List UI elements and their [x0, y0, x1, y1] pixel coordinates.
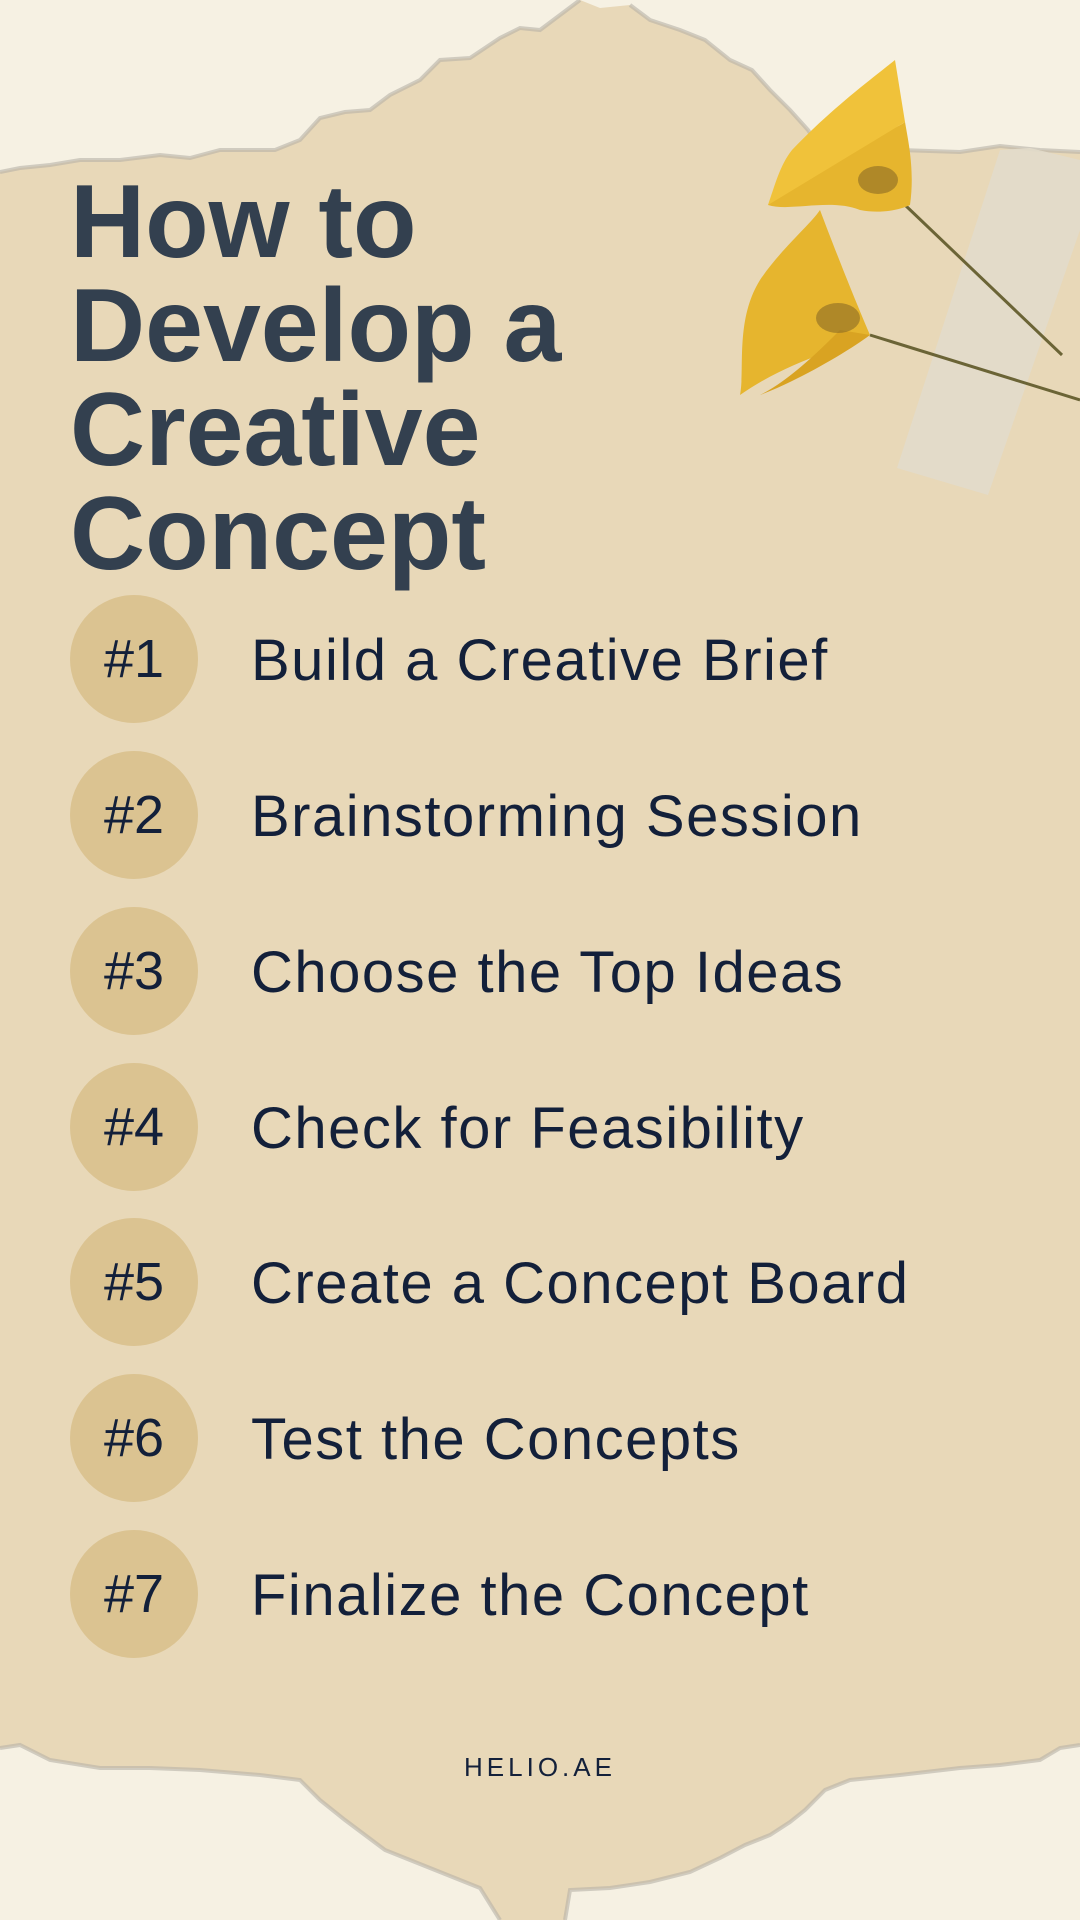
- title: How to: [70, 164, 417, 280]
- step 6: Test the Concepts: [251, 1407, 741, 1472]
- step 7: [70, 1530, 810, 1658]
- step 5: #5: [104, 1252, 164, 1312]
- step 2: [70, 751, 863, 879]
- step 1: #1: [104, 629, 164, 689]
- step 1: [70, 595, 829, 723]
- step 2: Brainstorming Session: [251, 784, 863, 849]
- step 7: Finalize the Concept: [251, 1563, 810, 1628]
- step list: [70, 595, 909, 1658]
- step 3: #3: [104, 941, 164, 1001]
- step 3: [70, 907, 844, 1035]
- step 4: [70, 1063, 805, 1191]
- step 5: Create a Concept Board: [251, 1251, 909, 1316]
- step 4: #4: [104, 1097, 164, 1157]
- stems: [905, 205, 1062, 355]
- flower 1: [768, 60, 912, 212]
- step 6: #6: [104, 1408, 164, 1468]
- flower 2: [740, 210, 870, 395]
- title: Develop a: [70, 268, 561, 384]
- decoration: pressed flowers and tape: [740, 60, 1080, 495]
- footer brand: HELIO.AE: [464, 1752, 616, 1782]
- step 2: #2: [104, 785, 164, 845]
- title: Concept: [70, 476, 486, 592]
- title: Creative: [70, 372, 480, 488]
- step 6: [70, 1374, 741, 1502]
- tape: [897, 148, 1080, 495]
- step 3: Choose the Top Ideas: [251, 940, 844, 1005]
- step 5: [70, 1218, 909, 1346]
- step 4: Check for Feasibility: [251, 1096, 805, 1161]
- step 1: Build a Creative Brief: [251, 628, 829, 693]
- title: [70, 164, 562, 592]
- step 7: #7: [104, 1564, 164, 1624]
